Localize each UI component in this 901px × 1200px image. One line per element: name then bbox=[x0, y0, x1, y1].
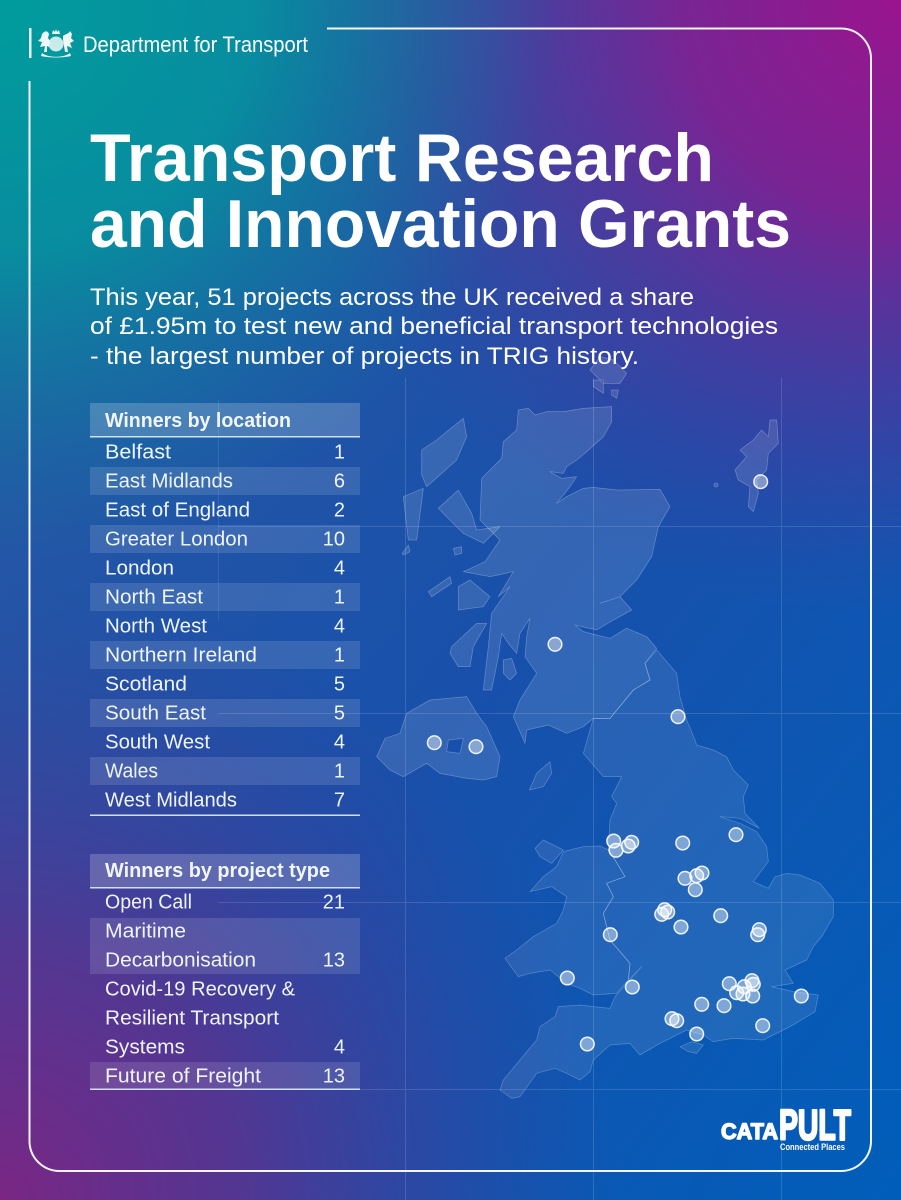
row: Scotland: Scotland bbox=[105, 674, 187, 696]
row: East of England bbox=[105, 500, 345, 522]
row: Northern Ireland: 1 bbox=[334, 644, 345, 666]
row: West Midlands: 7 bbox=[334, 790, 345, 812]
row: Wales bbox=[90, 757, 360, 785]
row: Maritime Decarbonisation bbox=[90, 918, 360, 974]
catapult logo bbox=[721, 1102, 851, 1152]
row: Covid-19 Recovery & Resilient Transport Systems: Resilient Transport bbox=[105, 1008, 279, 1030]
map: project location markers bbox=[428, 475, 808, 1051]
row: East of England: 2 bbox=[334, 500, 345, 522]
table header: Winners by project type bbox=[105, 860, 330, 882]
row: Wales: 1 bbox=[334, 760, 345, 782]
table header bbox=[90, 403, 360, 438]
row: East Midlands bbox=[90, 467, 360, 495]
table: winners by project type bbox=[90, 854, 360, 1090]
row: Maritime Decarbonisation: Decarbonisation bbox=[105, 950, 256, 972]
map: England bbox=[500, 650, 833, 1098]
row: South East: 5 bbox=[334, 702, 345, 724]
row: Belfast: Belfast bbox=[105, 442, 171, 464]
row: Scotland bbox=[105, 674, 345, 696]
row: Covid-19 Recovery & Resilient Transport Systems: 4 bbox=[334, 1036, 345, 1058]
row: Open Call: Open Call bbox=[105, 892, 192, 914]
row: London: London bbox=[105, 558, 174, 580]
row: Future of Freight: 13 bbox=[323, 1066, 345, 1088]
row: Wales: Wales bbox=[105, 760, 158, 782]
department logo bbox=[29, 28, 308, 58]
row: Northern Ireland bbox=[90, 641, 360, 669]
row: Covid-19 Recovery & Resilient Transport Systems: Systems bbox=[105, 1036, 185, 1058]
UK map bbox=[377, 357, 833, 1098]
row: West Midlands bbox=[105, 790, 345, 812]
intro text: - the largest number of projects in TRIG history. bbox=[90, 343, 639, 370]
map: Northern Ireland bbox=[377, 697, 500, 780]
map: Wales bbox=[505, 762, 703, 1053]
title: Transport Research bbox=[90, 120, 714, 196]
row: Northern Ireland: Northern Ireland bbox=[105, 644, 257, 666]
row: Greater London bbox=[90, 525, 360, 553]
row: Future of Freight bbox=[90, 1062, 360, 1089]
row: South West: South West bbox=[105, 732, 210, 754]
table header bbox=[90, 854, 360, 888]
row: West Midlands: West Midlands bbox=[105, 790, 237, 812]
row: Covid-19 Recovery & Resilient Transport Systems: Covid-19 Recovery & bbox=[105, 978, 296, 1000]
row: Belfast bbox=[105, 442, 345, 464]
intro text bbox=[90, 284, 778, 370]
row: London: 4 bbox=[334, 558, 345, 580]
row: North West: 4 bbox=[334, 616, 345, 638]
map: Scotland and islands bbox=[402, 357, 778, 743]
title: and Innovation Grants bbox=[90, 186, 791, 262]
row: South East bbox=[90, 699, 360, 727]
row: South West bbox=[105, 732, 345, 754]
row: North East: 1 bbox=[334, 586, 345, 608]
row: Greater London: 10 bbox=[323, 528, 345, 550]
intro text: of £1.95m to test new and beneficial transport technologies bbox=[90, 313, 778, 340]
row: East Midlands: East Midlands bbox=[105, 470, 233, 492]
catapult logo: Connected Places bbox=[780, 1142, 845, 1152]
logo text: Department for Transport bbox=[83, 32, 308, 57]
row: East of England: East of England bbox=[105, 500, 250, 522]
row: Maritime Decarbonisation: Maritime bbox=[105, 920, 186, 942]
table: winners by location bbox=[90, 403, 360, 816]
title bbox=[90, 120, 791, 262]
row: Belfast: 1 bbox=[334, 442, 345, 464]
intro text: This year, 51 projects across the UK received a share bbox=[90, 284, 694, 311]
row: Scotland: 5 bbox=[334, 674, 345, 696]
row: South West: 4 bbox=[334, 732, 345, 754]
row: London bbox=[105, 558, 345, 580]
row: Open Call bbox=[105, 892, 345, 914]
row: North West bbox=[105, 616, 345, 638]
row: Open Call: 21 bbox=[323, 892, 345, 914]
row: North West: North West bbox=[105, 616, 207, 638]
catapult logo: CATA bbox=[721, 1119, 778, 1144]
row: Greater London: Greater London bbox=[105, 528, 248, 550]
row: Maritime Decarbonisation: 13 bbox=[323, 950, 345, 972]
row: East Midlands: 6 bbox=[334, 470, 345, 492]
icon: royal crest bbox=[38, 29, 74, 58]
row: Covid-19 Recovery & Resilient Transport Systems bbox=[105, 978, 345, 1058]
row: North East bbox=[90, 583, 360, 611]
row: North East: North East bbox=[105, 586, 203, 608]
catapult logo: PULT bbox=[779, 1102, 851, 1150]
table header: Winners by location bbox=[105, 410, 291, 432]
row: South East: South East bbox=[105, 702, 206, 724]
row: Future of Freight: Future of Freight bbox=[105, 1066, 261, 1088]
